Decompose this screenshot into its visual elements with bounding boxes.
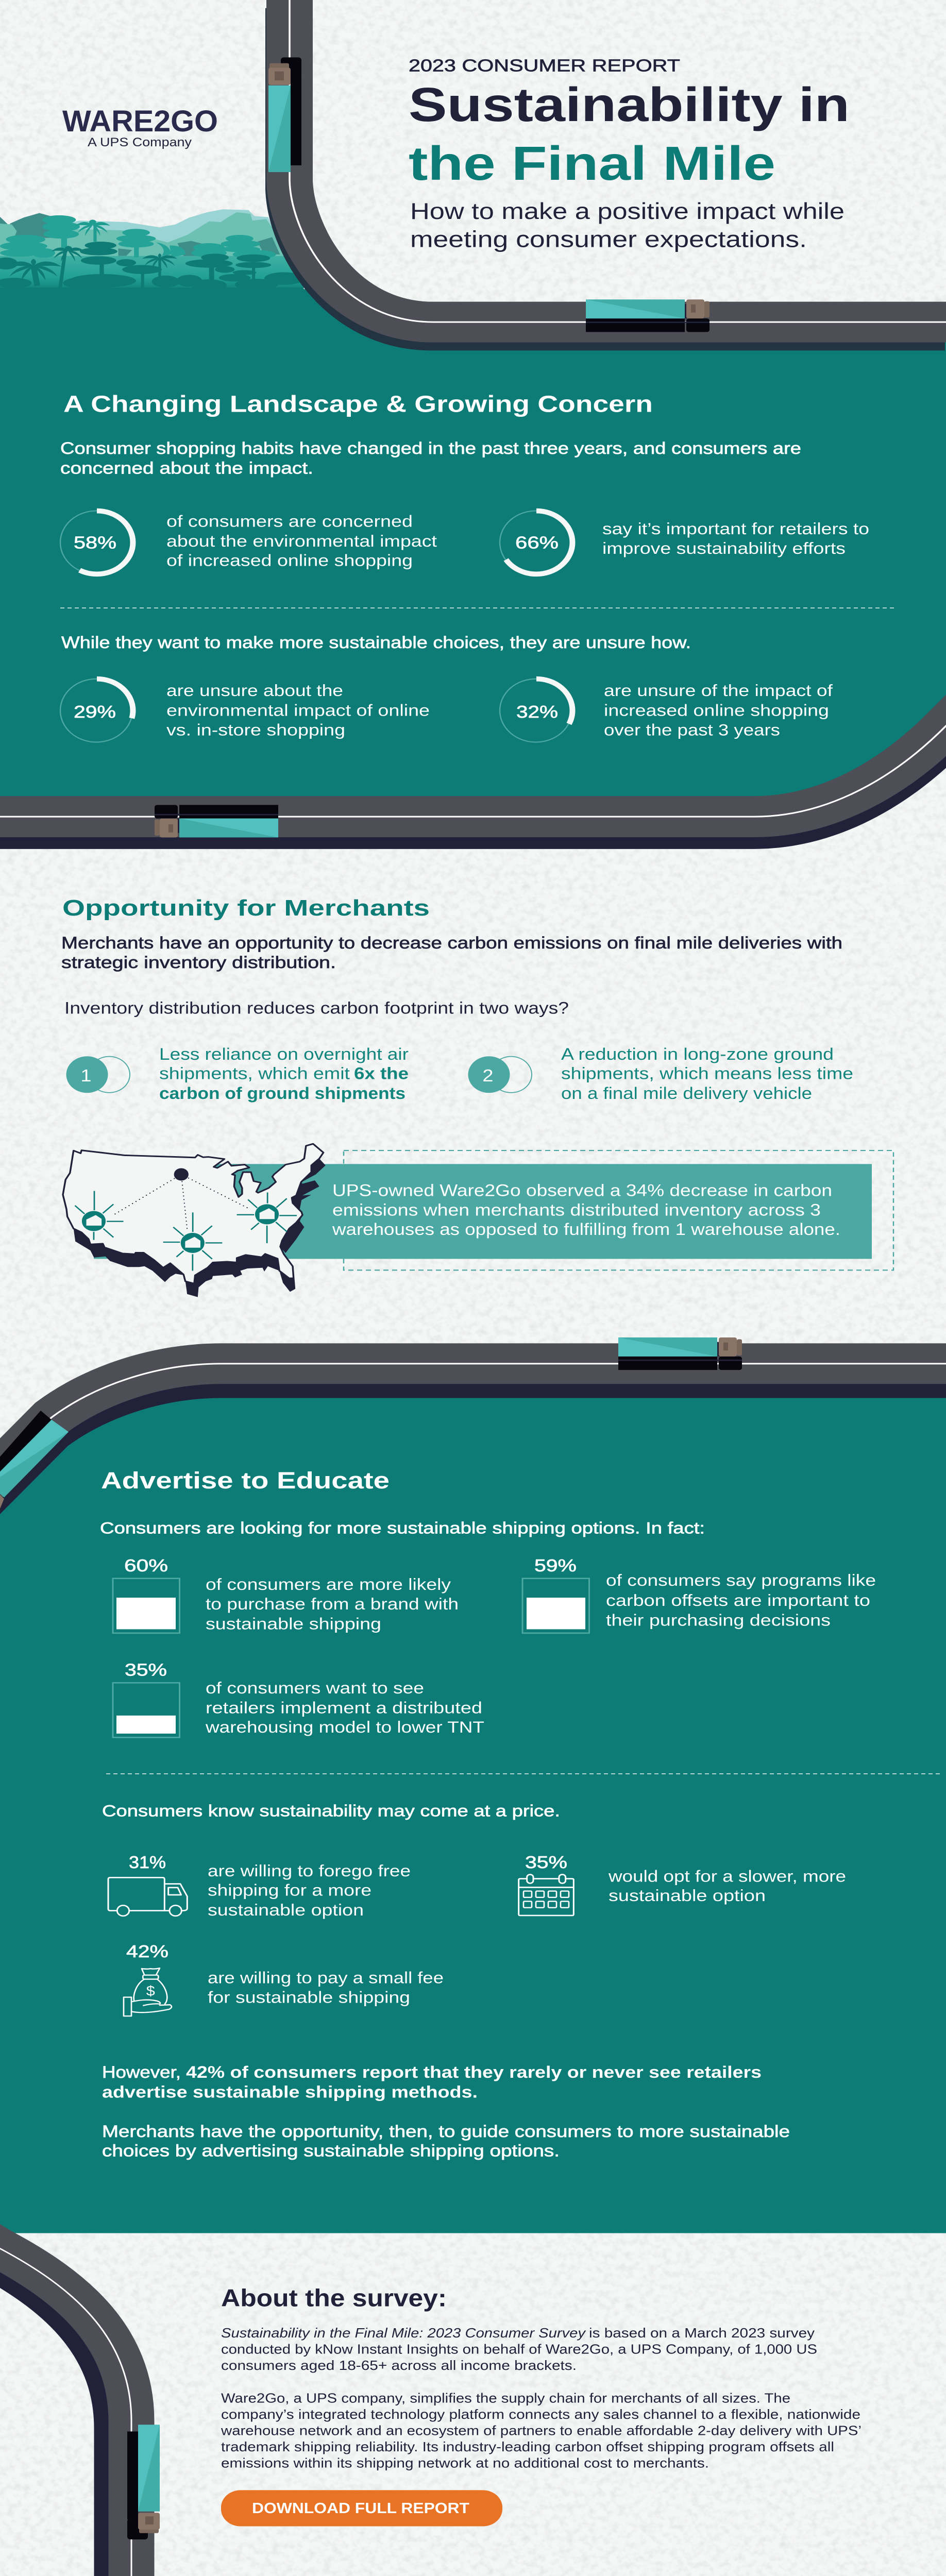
title block: the Final Mile bbox=[409, 137, 775, 190]
bar text: 59%: of consumers say programs like bbox=[606, 1571, 876, 1590]
bar text: 60% bbox=[206, 1575, 459, 1633]
callout box bbox=[94, 1150, 893, 1270]
reason 2 text: shipments, which means less time bbox=[561, 1065, 853, 1083]
stat text: 29%: are unsure about the bbox=[166, 682, 343, 700]
icon: money bag in hand bbox=[124, 1968, 172, 2016]
bar text: 59%: their purchasing decisions bbox=[606, 1611, 831, 1630]
bar text: 59% bbox=[606, 1571, 876, 1630]
icon: money bag in hand: $ bbox=[146, 1984, 155, 1999]
stat ring: 58%: 58% bbox=[74, 533, 116, 552]
callout text bbox=[332, 1182, 840, 1239]
conclusion text: choices by advertising sustainable shipping options. bbox=[102, 2142, 560, 2160]
stat text: 58%: about the environmental impact bbox=[166, 532, 437, 550]
reason 1 text: 6x the bbox=[354, 1065, 409, 1083]
stat text: 31%: shipping for a more bbox=[208, 1882, 371, 1900]
dotted routes bbox=[114, 1174, 248, 1229]
icon: calendar bbox=[519, 1874, 573, 1916]
road: middle curve bbox=[0, 703, 946, 828]
road: top curve bbox=[289, 0, 946, 330]
paragraph: survey: Sustainability in the Final Mile: 2023 Consumer Survey bbox=[221, 2325, 586, 2341]
bar text: 59%: carbon offsets are important to bbox=[606, 1591, 870, 1609]
title block bbox=[409, 56, 850, 252]
intro text: strategic inventory distribution. bbox=[61, 954, 336, 972]
stat text: 58%: of increased online shopping bbox=[166, 552, 413, 570]
warehouse: west bbox=[75, 1191, 123, 1240]
stat text: 29%: environmental impact of online bbox=[166, 702, 430, 720]
paragraph: company: trademark shipping reliability. Its industry-leading carbon offset shipping program offsets all bbox=[221, 2439, 834, 2454]
intro text: Merchants have an opportunity to decrease carbon emissions on final mile deliveries with bbox=[61, 934, 842, 953]
intro text bbox=[60, 439, 801, 478]
heading: Opportunity for Merchants bbox=[62, 895, 430, 920]
subheading: While they want to make more sustainable choices, they are unsure how. bbox=[61, 634, 691, 652]
road: third curve bbox=[0, 1364, 946, 1509]
stat ring: 29% bbox=[60, 679, 133, 742]
title block: How to make a positive impact while bbox=[410, 199, 844, 224]
bar text: 60%: sustainable shipping bbox=[206, 1615, 381, 1633]
bar text: 60%: to purchase from a brand with bbox=[206, 1595, 459, 1613]
panel: advertise background bbox=[0, 1373, 946, 2233]
bar stat: 59% bbox=[522, 1556, 589, 1633]
bar text: 35%: retailers implement a distributed bbox=[206, 1699, 482, 1717]
button: download full report: DOWNLOAD FULL REPORT bbox=[252, 2500, 469, 2517]
conclusion text: Merchants have the opportunity, then, to guide consumers to more sustainable bbox=[102, 2123, 790, 2141]
warehouse: east bbox=[237, 1193, 297, 1243]
bar text: 60%: of consumers are more likely bbox=[206, 1575, 451, 1594]
bar text: 35% bbox=[205, 1679, 484, 1737]
stat ring: 66% bbox=[500, 511, 572, 574]
title block: Sustainability in bbox=[409, 78, 850, 131]
reason 2 text: A reduction in long-zone ground bbox=[561, 1045, 834, 1063]
stat text: 66%: improve sustainability efforts bbox=[602, 539, 846, 557]
stat: 31% truck bbox=[108, 1853, 187, 1916]
stat text: 42%: for sustainable shipping bbox=[208, 1988, 410, 2007]
intro text: Consumers are looking for more sustainable shipping options. In fact: bbox=[100, 1519, 705, 1537]
truck: bottom vertical bbox=[127, 2425, 160, 2539]
stat text: 31%: sustainable option bbox=[208, 1901, 364, 1920]
reason 1 text bbox=[159, 1045, 409, 1103]
question text: Inventory distribution reduces carbon footprint in two ways? bbox=[64, 999, 569, 1018]
panel: About the survey bbox=[221, 2284, 861, 2527]
stat: 31% truck: 31% bbox=[129, 1853, 166, 1872]
conclusion text: 42% of consumers report that they rarely or never see retailers bbox=[186, 2063, 762, 2081]
reason 2 text bbox=[561, 1045, 853, 1103]
truck: vertical top bbox=[268, 57, 301, 172]
stat ring: 29%: 29% bbox=[74, 702, 116, 722]
intro text: Consumer shopping habits have changed in the past three years, and consumers are bbox=[60, 439, 801, 458]
truck: third road horizontal bbox=[618, 1337, 742, 1370]
badge: number 2 bbox=[468, 1056, 532, 1093]
paragraph: company: emissions within its shipping network at no additional cost to merchants. bbox=[221, 2455, 709, 2470]
intro text: concerned about the impact. bbox=[60, 460, 313, 478]
bar text: 35%: of consumers want to see bbox=[206, 1679, 424, 1697]
stat text: 42% bbox=[208, 1969, 444, 2007]
conclusion text: However, bbox=[102, 2063, 181, 2081]
bar stat: 60%: 60% bbox=[124, 1556, 168, 1575]
button: download full report bbox=[221, 2490, 502, 2527]
paragraph: company: Ware2Go, a UPS company, simplifies the supply chain for merchants of all sizes. The bbox=[221, 2390, 790, 2405]
stat text: 32%: increased online shopping bbox=[604, 702, 829, 720]
paragraph: company: warehouse network and an ecosystem of partners to enable affordable 2-day delivery with UPS’ bbox=[221, 2422, 861, 2438]
callout text: emissions when merchants distributed inventory across 3 bbox=[332, 1201, 821, 1219]
conclusion text: advertise sustainable shipping methods. bbox=[102, 2083, 478, 2102]
warehouse: central bbox=[163, 1212, 222, 1271]
illustration: tropical forest bbox=[0, 209, 303, 297]
stat text: 29%: vs. in-store shopping bbox=[166, 721, 345, 739]
icon: delivery truck bbox=[108, 1877, 187, 1916]
truck: third road diagonal bbox=[0, 1411, 69, 1509]
paragraph: survey: conducted by kNow Instant Insights on behalf of Ware2Go, a UPS Company, of 1,000 US bbox=[221, 2341, 817, 2357]
callout text: UPS-owned Ware2Go observed a 34% decrease in carbon bbox=[332, 1182, 832, 1200]
paragraph: survey: consumers aged 18-65+ across all income brackets. bbox=[221, 2358, 577, 2373]
stat: 35% calendar: 35% bbox=[525, 1853, 567, 1872]
stat text: 42%: are willing to pay a small fee bbox=[208, 1969, 444, 1987]
stat ring: 66%: 66% bbox=[515, 533, 559, 552]
stat text: 32%: over the past 3 years bbox=[604, 721, 780, 739]
stat text: 32% bbox=[604, 682, 833, 739]
panel: changing landscape background bbox=[0, 289, 946, 817]
stat text: 31%: are willing to forego free bbox=[208, 1862, 411, 1880]
stat ring: 32% bbox=[500, 679, 572, 742]
badge: number 1: 1 bbox=[80, 1066, 92, 1085]
reason 1 text: shipments, which emit bbox=[159, 1065, 350, 1083]
heading: About the survey: bbox=[221, 2284, 447, 2312]
paragraph: company bbox=[221, 2390, 861, 2470]
panel: Advertise to Educate text bbox=[100, 1468, 941, 2160]
stat text: 66%: say it’s important for retailers to bbox=[602, 520, 869, 538]
stat: 35% calendar bbox=[519, 1853, 573, 1916]
heading: A Changing Landscape & Growing Concern bbox=[63, 391, 653, 417]
map: US warehouses bbox=[63, 1144, 326, 1297]
conclusion text bbox=[102, 2063, 790, 2160]
stat ring: 58% bbox=[60, 511, 133, 574]
truck: horizontal top bbox=[586, 299, 710, 332]
callout text: warehouses as opposed to fulfilling from 1 warehouse alone. bbox=[332, 1221, 840, 1239]
title block: meeting consumer expectations. bbox=[410, 227, 807, 252]
panel: Opportunity for Merchants bbox=[61, 895, 893, 1297]
stat text: 32%: are unsure of the impact of bbox=[604, 682, 833, 700]
road: bottom curve bbox=[0, 2230, 131, 2576]
paragraph: survey bbox=[221, 2325, 817, 2373]
stat text: 29% bbox=[166, 682, 430, 739]
panel: A Changing Landscape text bbox=[60, 391, 894, 742]
stat text: 31% bbox=[208, 1862, 411, 1920]
truck: middle road bbox=[155, 805, 278, 837]
stat text: 35%: would opt for a slower, more bbox=[608, 1867, 846, 1886]
paragraph: company: company’s integrated technology platform connects any sales channel to a flexible, nationwide bbox=[221, 2406, 860, 2421]
logo: Ware2Go bbox=[62, 105, 218, 149]
hub: origin warehouse bbox=[174, 1168, 189, 1180]
bar text: 35%: warehousing model to lower TNT bbox=[205, 1718, 484, 1737]
stat text: 35%: sustainable option bbox=[609, 1887, 766, 1905]
stat text: 58% bbox=[166, 512, 437, 570]
stat text: 35% bbox=[608, 1867, 846, 1905]
bar stat: 35%: 35% bbox=[125, 1660, 167, 1680]
reason 1 text: Less reliance on overnight air bbox=[159, 1045, 409, 1063]
stat text: 66% bbox=[602, 520, 869, 557]
reason 2 text: on a final mile delivery vehicle bbox=[561, 1084, 812, 1103]
reason 1 text: carbon of ground shipments bbox=[159, 1084, 406, 1103]
stat text: 58%: of consumers are concerned bbox=[166, 512, 413, 531]
bar stat: 60% bbox=[113, 1556, 179, 1633]
stat: 42% money bag: 42% bbox=[126, 1942, 168, 1961]
intro text bbox=[61, 934, 842, 972]
title block: 2023 CONSUMER REPORT bbox=[409, 56, 680, 75]
heading: Advertise to Educate bbox=[101, 1468, 390, 1494]
badge: number 2: 2 bbox=[482, 1066, 494, 1085]
logo: Ware2Go: A UPS Company bbox=[88, 136, 192, 149]
paragraph: survey: is based on a March 2023 survey bbox=[589, 2325, 815, 2341]
stat ring: 32%: 32% bbox=[516, 702, 558, 722]
bar stat: 59%: 59% bbox=[534, 1556, 577, 1575]
logo: Ware2Go: WARE2GO bbox=[62, 105, 218, 138]
bar stat: 35% bbox=[113, 1660, 179, 1737]
badge: number 1 bbox=[66, 1056, 130, 1093]
subheading: Consumers know sustainability may come at a price. bbox=[102, 1802, 560, 1820]
stat: 42% money bag bbox=[124, 1942, 172, 2016]
